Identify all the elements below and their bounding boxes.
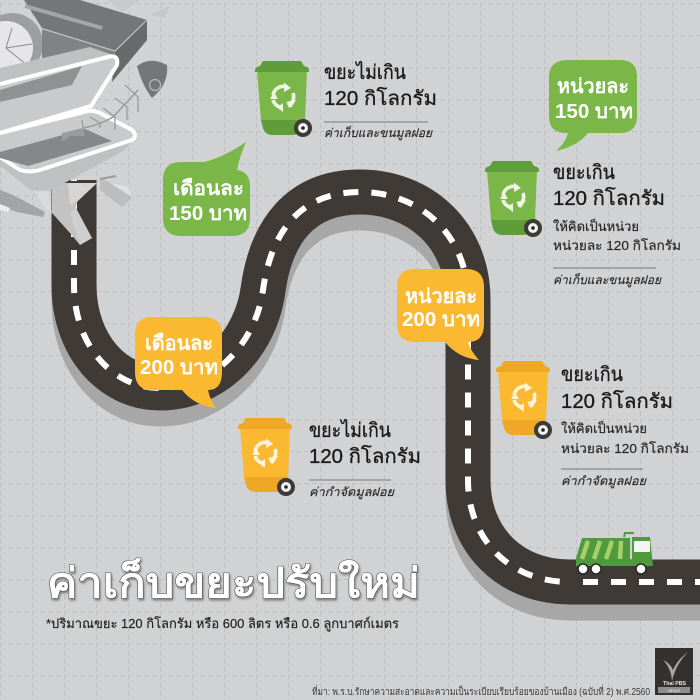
panel: over 120 kg, disposal fee: [496, 361, 689, 489]
caption: [561, 468, 643, 470]
callout: 200 baht per unit: 200 บาท: [402, 309, 480, 331]
callout: 200 baht per month: 200 บาท: [140, 357, 218, 379]
caption: [553, 267, 656, 269]
illustration: pile of rubbish: [0, 0, 170, 245]
panel: 120 kg or less, disposal fee: [238, 418, 421, 500]
panel: over 120 kg, disposal fee: หน่วยละ 120 กิโลกรัม: [561, 441, 689, 456]
citrus slice: [0, 13, 43, 75]
caption: ค่าเก็บและขนมูลฝอย: [324, 125, 433, 141]
panel: over 120 kg, collection fee: ค่าเก็บและขนมูลฝอย: [553, 272, 662, 288]
icon: yellow bin: [238, 418, 295, 496]
heading: ขยะเกิน: [561, 364, 623, 386]
panel: 120 kg or less, disposal fee: ค่ากำจัดมูลฝอย: [309, 485, 395, 500]
fish skeleton: [62, 61, 167, 142]
panel: over 120 kg, disposal fee: ค่ากำจัดมูลฝอย: [561, 474, 647, 489]
logo: Thai PBS News: NEWS: [668, 688, 680, 693]
callout: 200 baht per month: เดือนละ: [145, 332, 213, 355]
detail text: ให้คิดเป็นหน่วย: [553, 217, 639, 234]
foam tray: [0, 111, 135, 191]
callout: 150 baht per month: เดือนละ: [173, 177, 244, 200]
icon: yellow bin: [496, 361, 552, 439]
callout: 200 baht per unit: หน่วยละ: [405, 286, 477, 308]
callout: 200 baht per unit: [397, 269, 484, 360]
panel: over 120 kg, collection fee: 120 กิโลกรัม: [553, 187, 665, 210]
cardboard box: [24, 0, 147, 82]
logo: Thai PBS News: Thai PBS: [663, 681, 687, 687]
heading: ขยะไม่เกิน: [324, 61, 406, 84]
panel: over 120 kg, collection fee: หน่วยละ 120 กิโลกรัม: [553, 238, 681, 253]
panel: over 120 kg, disposal fee: 120 กิโลกรัม: [561, 390, 673, 413]
paper and bottle debris: [0, 0, 170, 217]
callout: 150 baht per unit: 150 บาท: [555, 101, 633, 123]
rubbish on the road start: [52, 183, 97, 245]
icon: green bin: [485, 161, 542, 237]
heading: ขยะเกิน: [553, 162, 615, 184]
icon: garbage truck: [576, 533, 653, 574]
panel: monthly 120 kg or less, collection fee: 120 กิโลกรัม: [324, 87, 437, 110]
panel: over 120 kg, collection fee: [485, 161, 681, 288]
footnote: *ปริมาณขยะ 120 กิโลกรัม หรือ 600 ลิตร หรือ 0.6 ลูกบาศก์เมตร: [46, 616, 399, 632]
callout: 150 baht per unit: [549, 60, 637, 151]
callout: 150 baht per month: [163, 142, 250, 236]
callout: 150 baht per unit: หน่วยละ: [557, 76, 629, 98]
logo: Thai PBS News: [655, 648, 693, 695]
icon: green bin: [255, 61, 312, 137]
panel: monthly 120 kg or less, collection fee: [255, 61, 437, 141]
callout: 200 baht per month: [135, 317, 222, 408]
heading: ขยะไม่เกิน: [309, 419, 391, 442]
caption: [309, 479, 391, 481]
detail text: ให้คิดเป็นหน่วย: [561, 419, 647, 436]
foam lid: [0, 47, 117, 133]
winding road: [74, 180, 700, 598]
callout: 150 baht per month: 150 บาท: [169, 203, 247, 225]
title: ค่าเก็บขยะปรับใหม่: [47, 558, 420, 606]
panel: 120 kg or less, disposal fee: 120 กิโลกรัม: [309, 445, 421, 468]
